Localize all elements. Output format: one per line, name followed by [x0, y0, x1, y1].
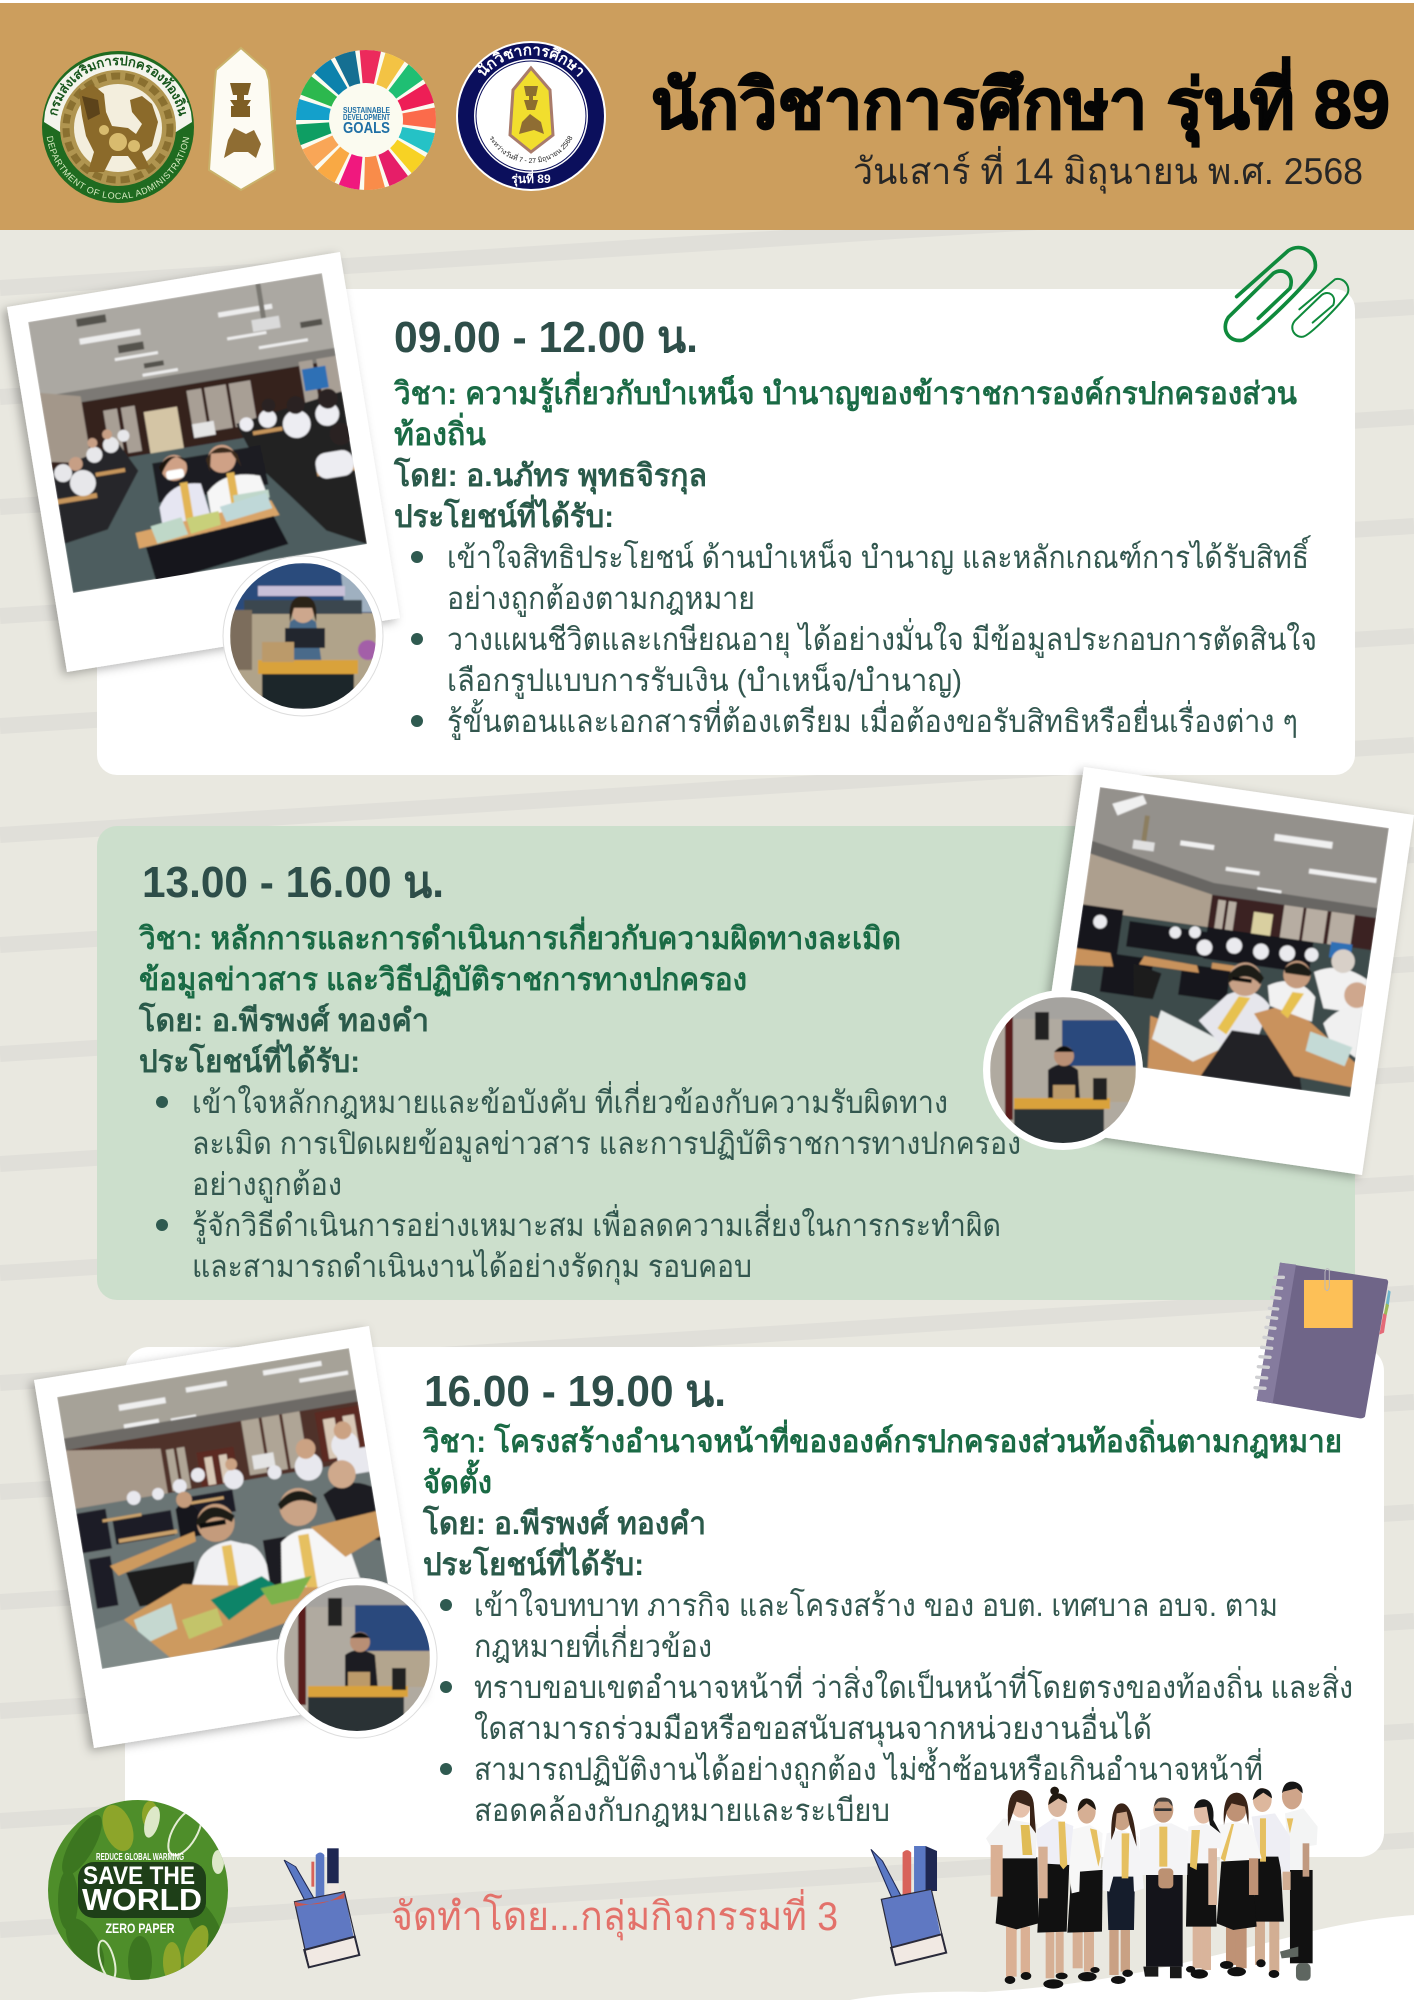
session 1 text: วิชา: ความรู้เกี่ยวกับบำเหน็จ บำนาญของข้าราชการองค์กรปกครองส่วน [393, 371, 1297, 413]
session 2 text: ข้อมูลข่าวสาร และวิธีปฏิบัติราชการทางปกครอง [139, 962, 747, 999]
session 1 text: รู้ขั้นตอนและเอกสารที่ต้องเตรียม เมื่อต้องขอรับสิทธิหรือยื่นเรื่องต่าง ๆ [447, 699, 1298, 740]
logo: sustainable development goals wheel: DEVELOPMENT [343, 113, 390, 122]
person 9 [1280, 1782, 1318, 1981]
person 2 [1036, 1787, 1073, 1989]
logo: sustainable development goals wheel [296, 50, 436, 190]
logo: class 89 seal: รุ่นที่ 89 [511, 170, 551, 187]
logo: sustainable development goals wheel: GOALS [343, 120, 390, 137]
session 3 text: สามารถปฏิบัติงานได้อย่างถูกต้อง ไม่ซ้ำซ้อนหรือเกินอำนาจหน้าที่ [474, 1747, 1263, 1788]
session 3 text: วิชา: โครงสร้างอำนาจหน้าที่ขององค์กรปกครองส่วนท้องถิ่นตามกฎหมาย [422, 1419, 1342, 1459]
session 3 text: ใดสามารถร่วมมือหรือขอสนับสนุนจากหน่วยงานอื่นได้ [474, 1707, 1152, 1748]
session 3 text: ประโยชน์ที่ได้รับ: [423, 1542, 644, 1582]
icon: pen cup right [871, 1846, 946, 1965]
icon: save the world badge: SAVE THE [83, 1862, 195, 1890]
session 2 text: รู้จักวิธีดำเนินการอย่างเหมาะสม เพื่อลดความเสี่ยงในการกระทำผิด [192, 1204, 1001, 1244]
icon: paper clips [1225, 248, 1348, 341]
person 3 [1067, 1798, 1103, 1981]
session 3 text: กฎหมายที่เกี่ยวข้อง [474, 1625, 712, 1664]
speaker photo 2 [983, 990, 1143, 1150]
session 2 text: 13.00 - 16.00 น. [142, 858, 444, 907]
polaroid photo 1 [7, 252, 400, 672]
session 1 text: โดย: อ.นภัทร พุทธจิรกุล [393, 457, 707, 495]
session 1 text [393, 313, 1317, 740]
session 2 text: โดย: อ.พีรพงศ์ ทองคำ [138, 1002, 429, 1038]
session 2 text: เข้าใจหลักกฎหมายและข้อบังคับ ที่เกี่ยวข้องกับความรับผิดทาง [192, 1081, 948, 1120]
person 1 [986, 1790, 1038, 1984]
session 1 text: ท้องถิ่น [394, 412, 486, 452]
icon: save the world badge [48, 1800, 230, 1988]
session 2 text: และสามารถดำเนินงานได้อย่างรัดกุม รอบคอบ [192, 1249, 752, 1286]
person 5 [1140, 1797, 1188, 1978]
icon: pen cup left [284, 1848, 359, 1967]
session 3 text: จัดตั้ง [423, 1459, 492, 1500]
logo: department of local administration [42, 51, 194, 203]
panel: evening session card [125, 1347, 1384, 1857]
footer credit: จัดทำโดย...กลุ่มกิจกรรมที่ 3 [391, 1889, 838, 1941]
session 1 text: เลือกรูปแบบการรับเงิน (บำเหน็จ/บำนาญ) [447, 662, 962, 699]
session 3 text: ทราบขอบเขตอำนาจหน้าที่ ว่าสิ่งใดเป็นหน้าที่โดยตรงของท้องถิ่น และสิ่ง [474, 1666, 1353, 1705]
title [651, 56, 1390, 194]
session 1 text: อย่างถูกต้องตามกฎหมาย [447, 581, 755, 617]
icon: save the world badge: ZERO PAPER [106, 1920, 174, 1936]
session 2 text [138, 858, 1021, 1286]
person 4 [1101, 1803, 1144, 1984]
person 8 [1252, 1788, 1291, 1978]
session 1 text: วางแผนชีวิตและเกษียณอายุ ได้อย่างมั่นใจ มีข้อมูลประกอบการตัดสินใจ [447, 618, 1317, 659]
session 2 text: อย่างถูกต้อง [192, 1167, 342, 1203]
session 3 text: โดย: อ.พีรพงศ์ ทองคำ [422, 1505, 706, 1541]
session 3 text: 16.00 - 19.00 น. [424, 1367, 726, 1416]
logo: sustainable development goals wheel: SUSTAINABLE [343, 106, 391, 115]
logo: department of local administration: DEPARTMENT OF LOCAL ADMINISTRATION [46, 136, 190, 200]
session 1 text: ประโยชน์ที่ได้รับ: [394, 494, 614, 534]
speaker photo 3 [277, 1578, 437, 1738]
session 3 text: สอดคล้องกับกฎหมายและระเบียบ [474, 1793, 890, 1828]
logo: class 89 seal: ระหว่างวันที่ 7 - 27 มิถุนายน 2568 [490, 136, 572, 163]
session 1 text: 09.00 - 12.00 น. [394, 313, 698, 362]
date subtitle: วันเสาร์ ที่ 14 มิถุนายน พ.ศ. 2568 [853, 145, 1363, 194]
panel: afternoon session card [97, 826, 1355, 1300]
team photo [986, 1782, 1318, 1989]
logo: white shield emblem [209, 48, 275, 190]
title: นักวิชาการศึกษา รุ่นที่ 89 [651, 56, 1390, 147]
panel: morning session card [97, 289, 1355, 775]
polaroid photo 3 [34, 1326, 429, 1748]
logo: department of local administration: กรมส่งเสริมการปกครองท้องถิ่น [50, 56, 190, 116]
icon: save the world badge: REDUCE GLOBAL WARMING [96, 1852, 184, 1863]
session 2 text: ละเมิด การเปิดเผยข้อมูลข่าวสาร และการปฏิบัติราชการทางปกครอง [192, 1126, 1021, 1162]
person 6 [1186, 1799, 1222, 1979]
logo: class 89 seal: นักวิชาการศึกษา [478, 46, 584, 77]
session 2 text: วิชา: หลักการและการดำเนินการเกี่ยวกับความผิดทางละเมิด [138, 916, 901, 956]
polaroid photo 2 [1032, 767, 1414, 1175]
session 2 text: ประโยชน์ที่ได้รับ: [139, 1039, 360, 1079]
icon: notebook [1255, 1263, 1391, 1418]
logo: class 89 seal [456, 41, 606, 191]
person 7 [1217, 1793, 1262, 1976]
icon: save the world badge: WORLD [82, 1882, 202, 1917]
speaker photo 1 [223, 556, 383, 716]
session 3 text [422, 1367, 1353, 1828]
header band [0, 3, 1414, 230]
session 1 text: เข้าใจสิทธิประโยชน์ ด้านบำเหน็จ บำนาญ และหลักเกณฑ์การได้รับสิทธิ์ [447, 534, 1312, 575]
session 3 text: เข้าใจบทบาท ภารกิจ และโครงสร้าง ของ อบต. เทศบาล อบจ. ตาม [474, 1588, 1278, 1623]
